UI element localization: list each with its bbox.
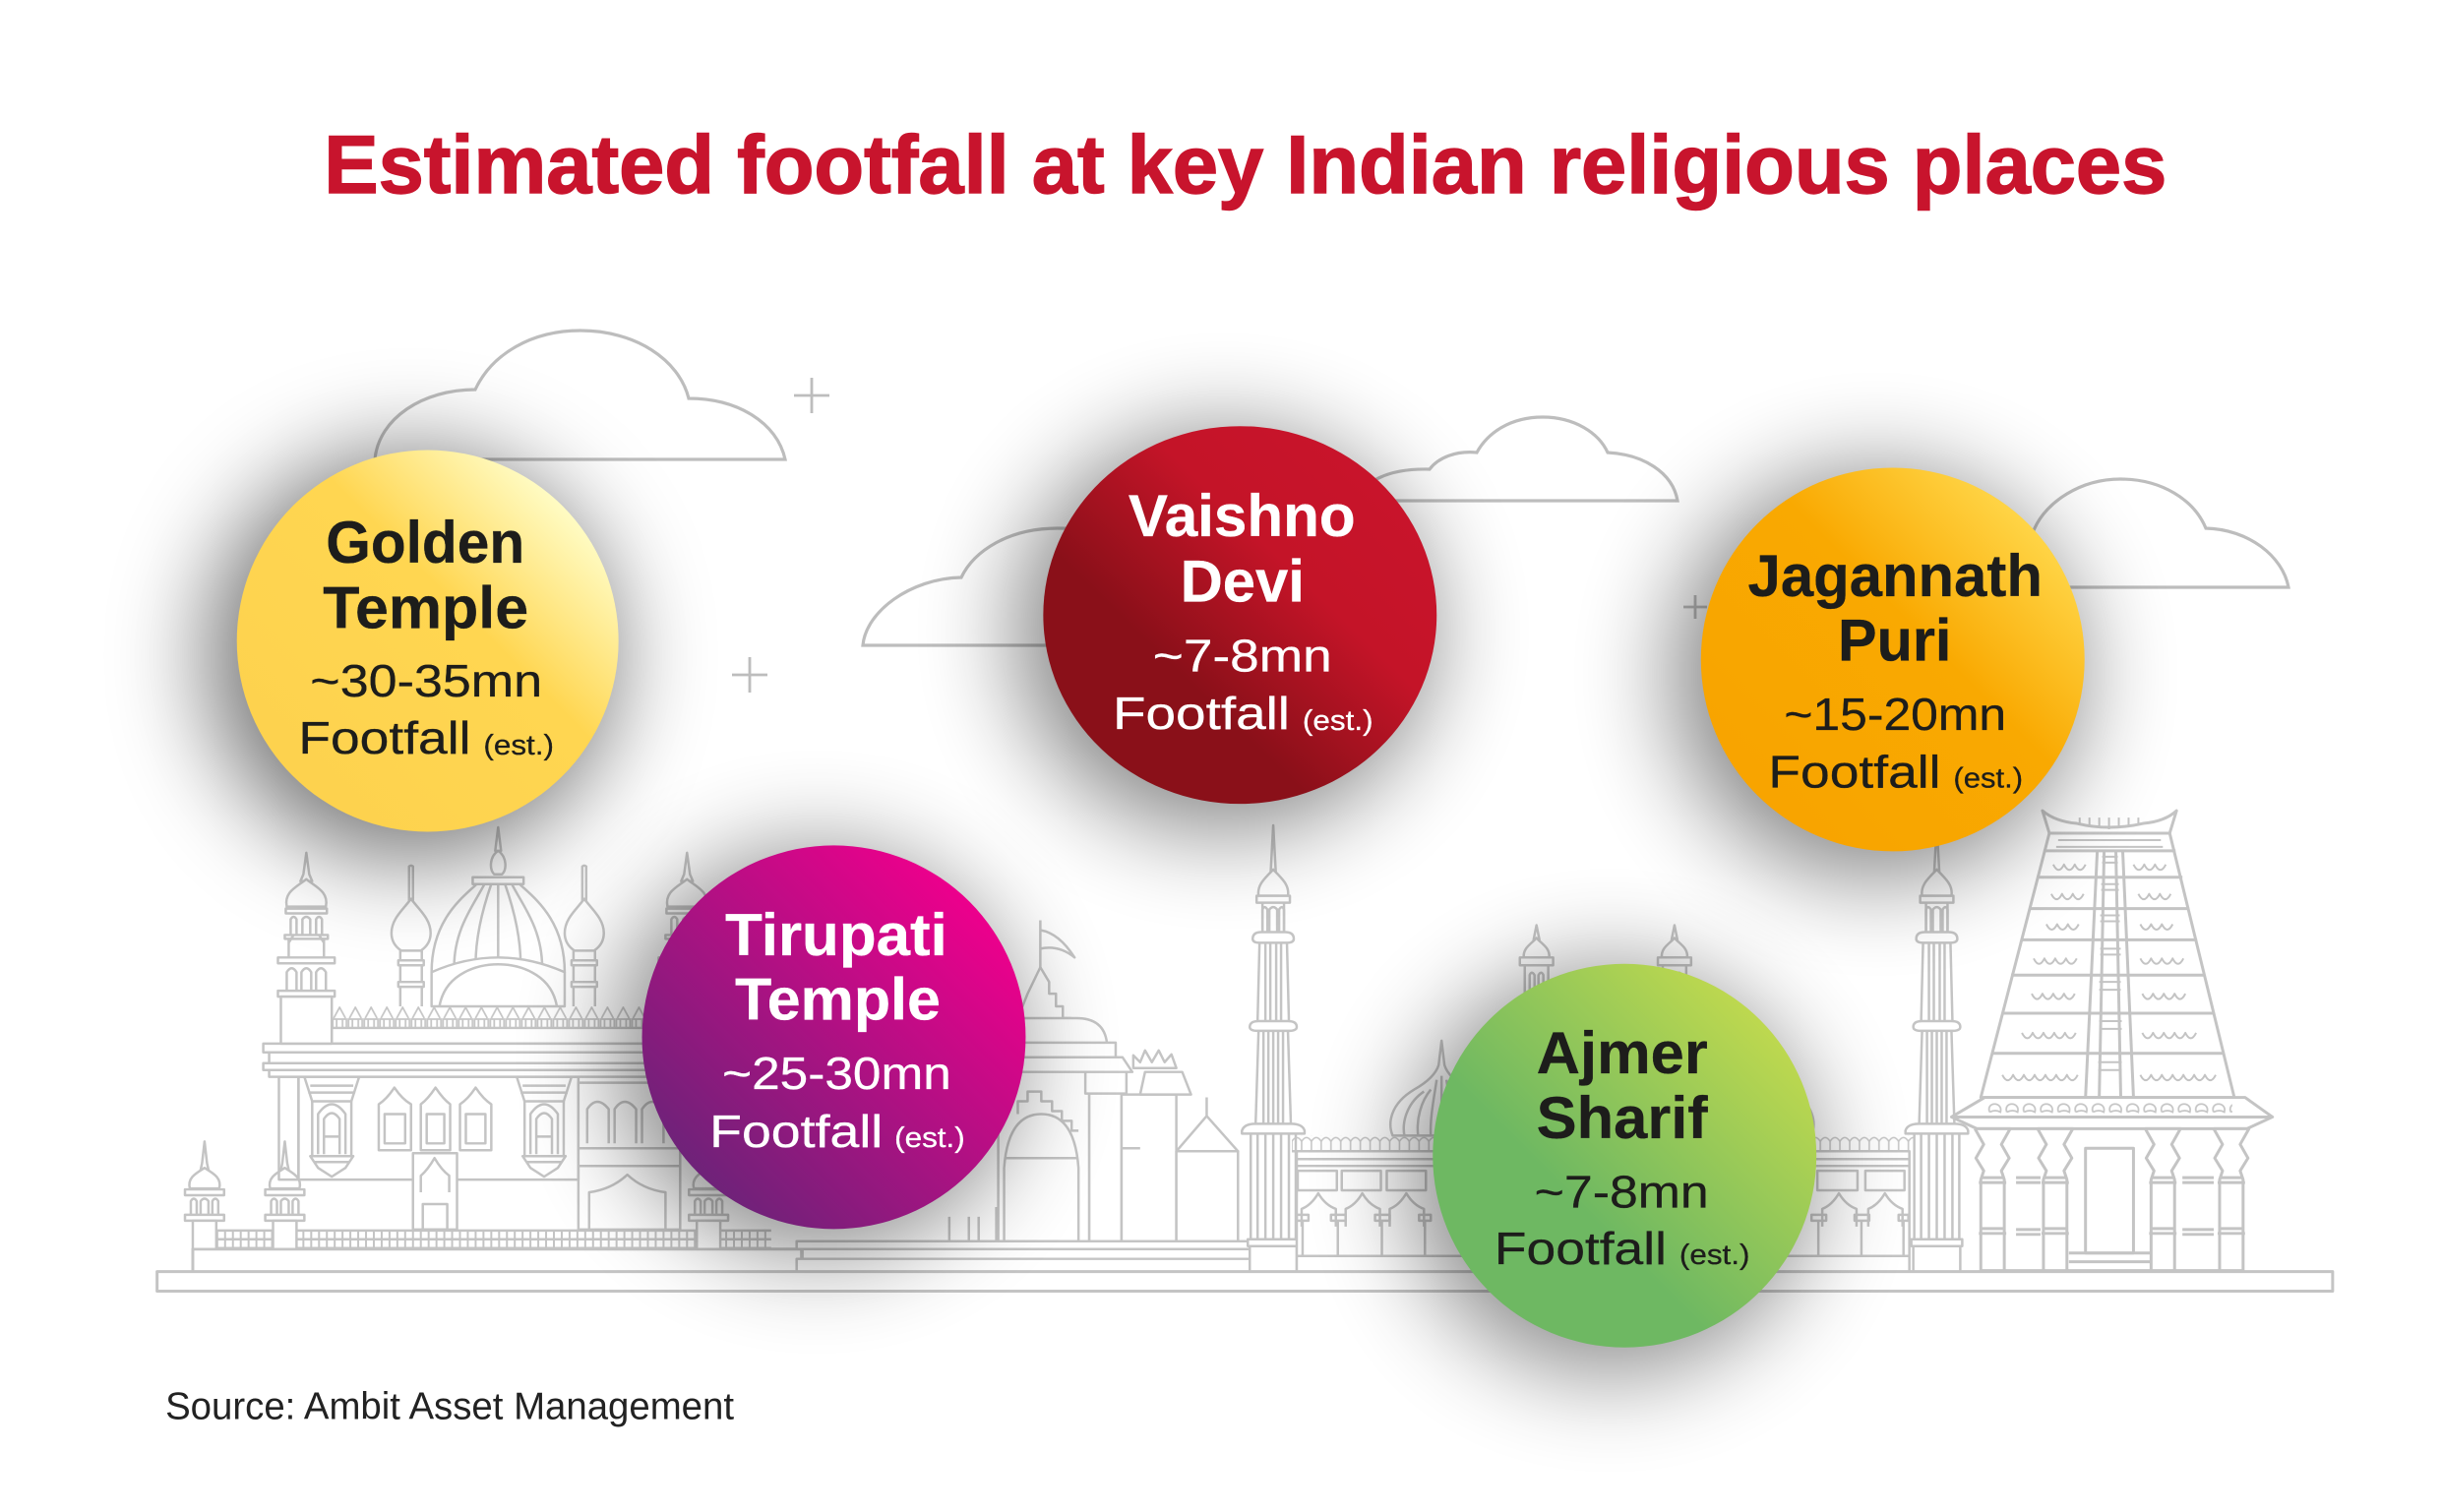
bubble: Tirupati Temple xyxy=(642,845,1025,1229)
value: ~7-8mn xyxy=(1535,1166,1709,1217)
value: ~25-30mn xyxy=(722,1048,951,1099)
name line 2: Sharif xyxy=(1537,1084,1709,1151)
estimate note: (est.) xyxy=(483,730,554,761)
bubble: Jagannath Puri xyxy=(1701,467,2085,851)
star: right xyxy=(1683,595,1707,619)
name line 2: Temple xyxy=(735,965,941,1032)
label: Footfall xyxy=(709,1106,883,1157)
shadow: Tirupati Temple bubble xyxy=(614,848,1020,1255)
cloud: right xyxy=(2007,479,2288,587)
title: Estimated footfall at key Indian religious places xyxy=(324,118,2166,211)
label: Footfall xyxy=(1495,1223,1667,1274)
value: ~15-20mn xyxy=(1784,689,2006,740)
cloud: top left xyxy=(375,331,785,459)
name: Vaishno xyxy=(1129,482,1356,549)
shadow: Jagannath Puri bubble xyxy=(1673,470,2080,877)
building: Tirupati Temple xyxy=(797,921,1254,1274)
shadow: Vaishno Devi bubble xyxy=(1015,432,1431,831)
shadow: Ajmer Sharif bubble xyxy=(1406,967,1813,1374)
estimate note: (est.) xyxy=(1953,763,2023,795)
label: Footfall xyxy=(1768,747,1940,798)
name: Tirupati xyxy=(725,901,947,968)
skyline illustration xyxy=(157,811,2333,1292)
value: ~30-35mn xyxy=(310,655,542,706)
cloud: centre right xyxy=(1358,417,1678,501)
building: Ajmer Sharif xyxy=(1292,925,1915,1274)
building: Golden Temple xyxy=(185,827,802,1274)
illustration: clouds and stars xyxy=(375,331,2288,693)
name: Jagannath xyxy=(1748,542,2043,609)
minaret: left xyxy=(1242,825,1305,1274)
bubble: Vaishno Devi xyxy=(1043,426,1436,804)
main artwork xyxy=(157,118,2333,1427)
name: Ajmer xyxy=(1537,1019,1708,1086)
building: Jagannath gopuram xyxy=(1951,811,2273,1274)
name: Golden xyxy=(326,509,524,575)
label: Footfall xyxy=(1113,688,1290,739)
estimate note: (est.) xyxy=(894,1122,965,1154)
ground strip xyxy=(157,1272,2333,1292)
bubble: Ajmer Sharif xyxy=(1433,964,1816,1348)
name line 2: Devi xyxy=(1181,548,1305,615)
star: middle xyxy=(732,657,767,693)
label: Footfall xyxy=(298,712,470,763)
estimate note: (est.) xyxy=(1303,705,1373,737)
source note: Source: Ambit Asset Management xyxy=(165,1385,734,1427)
estimate note: (est.) xyxy=(1679,1240,1750,1271)
shadow: Golden Temple bubble xyxy=(208,453,615,859)
skyline buildings xyxy=(185,811,2273,1274)
name line 2: Temple xyxy=(323,575,528,641)
name line 2: Puri xyxy=(1838,606,1951,673)
minaret: right xyxy=(1906,825,1968,1274)
cloud: centre left xyxy=(863,528,1151,645)
value: ~7-8mn xyxy=(1153,630,1332,681)
star: top xyxy=(794,378,829,413)
bubble: Golden Temple xyxy=(237,451,619,831)
